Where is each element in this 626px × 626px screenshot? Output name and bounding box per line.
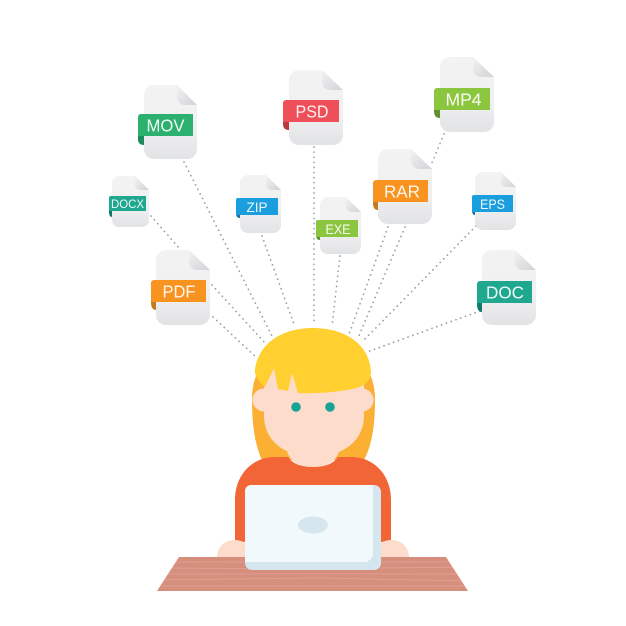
file icon: RAR [373,149,432,224]
infographic: person at laptop surrounded by file types [109,57,536,591]
file icon: MOV: MOV [146,116,185,136]
file icon: DOCX: DOCX [111,199,144,211]
ears [252,388,374,412]
neck [287,452,339,467]
person [217,328,409,558]
file icon: RAR: RAR [384,182,420,202]
file icon: EPS: EPS [480,196,505,212]
file icon: DOCX [109,176,149,227]
file icon: DOC: DOC [486,282,524,302]
eyes [291,402,335,412]
table [150,557,470,591]
file icon: PSD [283,70,343,145]
file icon: MOV [138,85,197,159]
file icon: ZIP: ZIP [246,199,268,215]
face [264,365,364,457]
file icon: MP4 [434,57,494,132]
file icon: PDF: PDF [162,282,196,302]
file icon: EXE [316,197,361,254]
shirt [235,457,391,542]
dotted connection lines [151,134,480,358]
file icon: PSD: PSD [296,102,328,122]
fringe hair [255,328,371,393]
back hair [252,350,375,460]
laptop [245,485,381,570]
file icon: PDF [151,250,210,325]
file icon: MP4: MP4 [446,90,482,110]
file icon: ZIP [236,175,281,233]
file icon: EXE: EXE [326,221,350,237]
file icon: DOC [477,250,536,325]
laptop logo [298,516,328,534]
hands [217,540,409,558]
file icon: EPS [472,172,516,230]
